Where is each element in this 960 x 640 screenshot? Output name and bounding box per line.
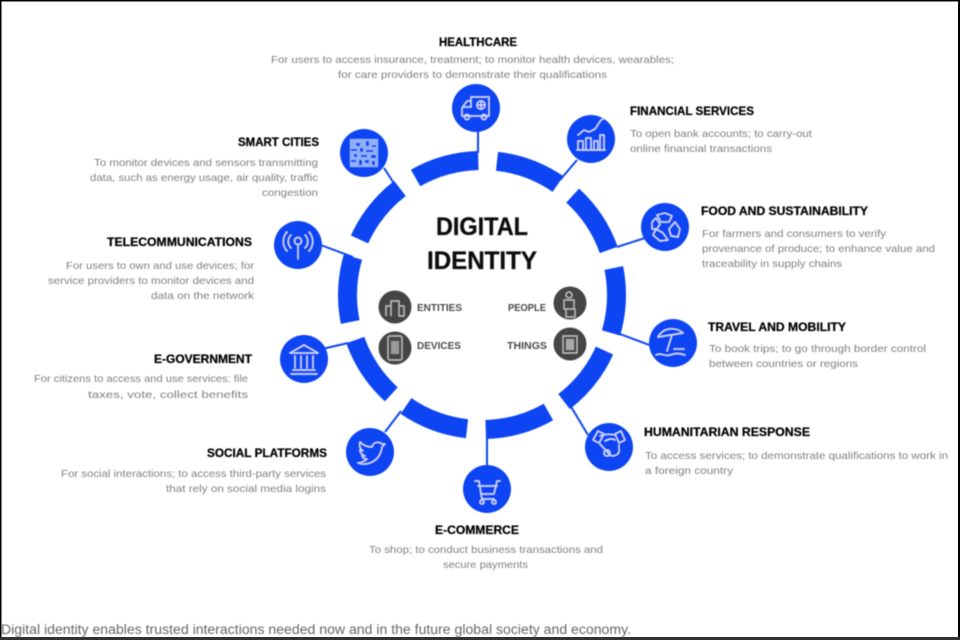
label: e-government: For citizens to access and use services: file [34,373,248,385]
icon: telecommunications antenna [274,221,322,269]
label: financial services: online financial transactions [630,143,772,155]
label: e-government: taxes, vote, collect benefits [88,389,248,401]
label: telecommunications: data on the network [151,290,255,302]
connector lines [318,130,652,466]
label: social platforms: that rely on social media logins [166,483,326,495]
center item: things [507,328,586,360]
label: travel and mobility: To book trips; to go through border control [709,343,926,355]
icon: e-government building [280,335,328,383]
label: healthcare [271,35,674,81]
icon: financial chart [567,115,615,163]
center item: things: THINGS [507,341,547,352]
label: financial services: To open bank accounts; to carry-out [630,128,812,140]
label: food and sustainability: traceability in supply chains [702,258,842,270]
center item: devices: DEVICES [417,341,461,352]
icon: e-commerce cart [463,465,511,513]
center title: DIGITAL [436,213,528,241]
label: humanitarian response: To access services; to demonstrate qualifications to work in [645,450,948,462]
label: humanitarian response: HUMANITARIAN RESPONSE [644,425,810,439]
center item: devices [378,332,461,364]
label: food and sustainability: For farmers and consumers to verify [702,228,887,240]
label: smart cities: congestion [262,187,318,199]
label: social platforms [61,446,327,495]
icon: travel beach umbrella [649,319,697,367]
label: telecommunications: For users to own and use devices; for [66,260,255,272]
icon: food recycling [641,203,689,251]
label: e-commerce: secure payments [443,559,528,571]
label: e-commerce [369,523,603,571]
icon: humanitarian handshake [585,423,633,471]
caption: Digital identity enables trusted interactions needed now and in the future global society and economy. [1,622,631,637]
label: social platforms: SOCIAL PLATFORMS [207,446,327,460]
label: healthcare: for care providers to demonstrate their qualifications [338,69,607,81]
label: e-government [34,352,253,401]
label: telecommunications: TELECOMMUNICATIONS [107,235,252,249]
center item: people: PEOPLE [508,303,546,314]
label: social platforms: For social interactions; to access third-party services [61,468,326,480]
label: travel and mobility: between countries or regions [709,358,858,370]
label: humanitarian response [644,425,948,477]
label: travel and mobility: TRAVEL AND MOBILITY [708,320,846,334]
label: e-commerce: To shop; to conduct business transactions and [369,544,603,556]
label: e-commerce: E-COMMERCE [435,523,519,537]
label: telecommunications [48,235,255,302]
label: food and sustainability [701,204,935,270]
label: telecommunications: service providers to monitor devices and [48,275,254,287]
icon: smart cities QR [340,129,388,177]
label: humanitarian response: a foreign country [645,465,734,477]
icon: social platforms bird [346,428,394,476]
label: food and sustainability: FOOD AND SUSTAINABILITY [701,204,868,218]
ring of ten arc segments [333,146,631,444]
label: e-government: E-GOVERNMENT [154,352,253,366]
label: smart cities [90,135,319,199]
label: healthcare: For users to access insurance, treatment; to monitor health devices, wearables; [271,54,674,66]
label: healthcare: HEALTHCARE [439,35,517,49]
center title [427,213,537,275]
center item: people [508,286,586,320]
label: financial services [630,104,812,155]
label: smart cities: To monitor devices and sensors transmitting [94,157,318,169]
label: financial services: FINANCIAL SERVICES [630,104,754,118]
center item: entities [378,290,462,324]
label: food and sustainability: provenance of produce; to enhance value and [702,243,935,255]
icon: healthcare ambulance [452,84,500,132]
center title: IDENTITY [427,247,537,275]
label: smart cities: data, such as energy usage, air quality, traffic [90,172,318,184]
label: smart cities: SMART CITIES [238,135,319,149]
center item: entities: ENTITIES [417,303,462,314]
label: travel and mobility [708,320,926,370]
